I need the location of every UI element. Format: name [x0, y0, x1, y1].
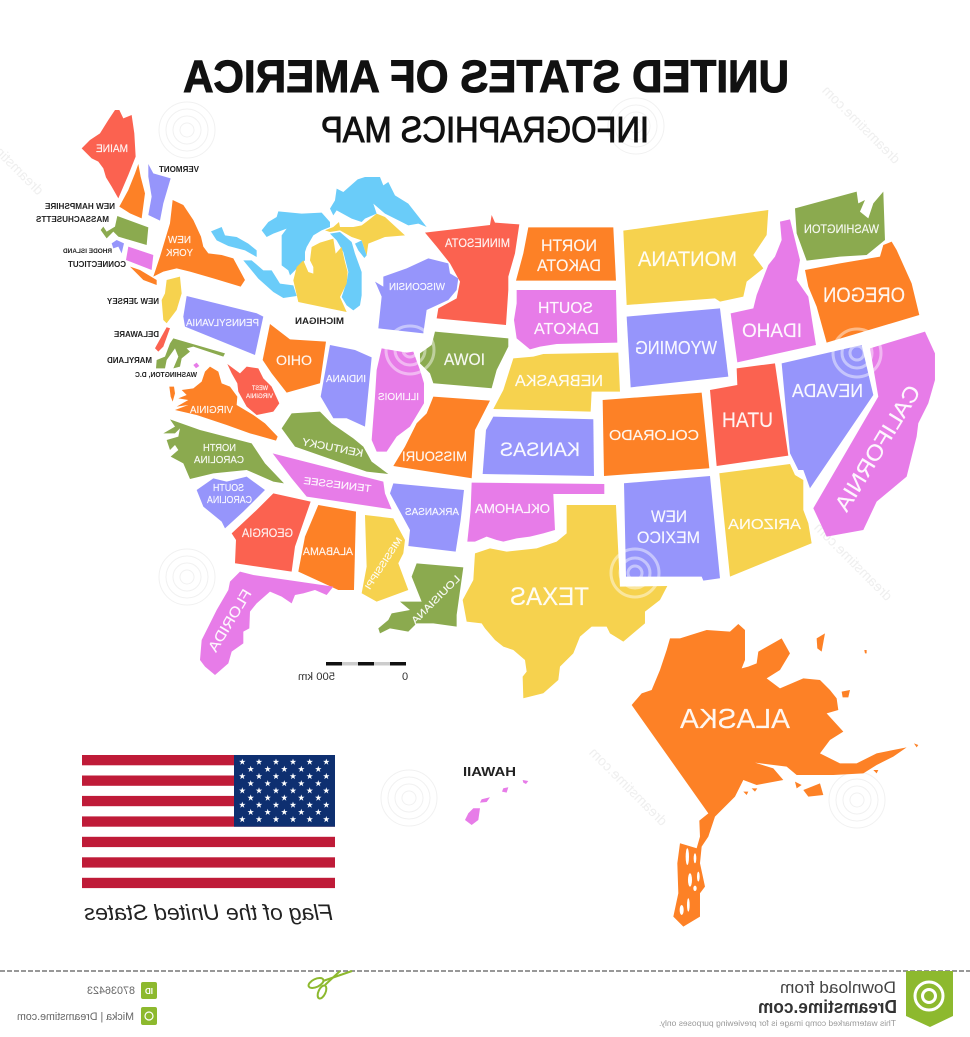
state: South Dakota: DAKOTA	[534, 321, 599, 338]
state name labels outside map: MICHIGAN	[295, 316, 344, 327]
state: Wyoming: WYOMING	[635, 338, 717, 358]
state: Minnesota	[425, 215, 519, 325]
state: Rhode Island	[112, 240, 124, 253]
footer: image id	[87, 982, 157, 999]
state: Pennsylvania: PENNSYLVANIA	[186, 317, 259, 329]
state: Oklahoma: OKLAHOMA	[475, 501, 550, 516]
state: North Dakota: DAKOTA	[536, 256, 601, 275]
state: Oregon	[805, 242, 919, 343]
state: North Carolina	[163, 419, 284, 483]
watermark spirals	[159, 98, 885, 828]
state: Arizona	[719, 464, 812, 577]
state: Illinois: ILLINOIS	[378, 392, 419, 403]
footer: image id: 87036423	[87, 985, 135, 997]
state: Idaho: IDAHO	[742, 321, 802, 342]
state: Mississippi: MISSISSIPPI	[363, 535, 404, 591]
faint spirals over states	[386, 326, 881, 597]
state: Washington	[795, 192, 885, 261]
state: Maine: MAINE	[96, 143, 128, 155]
state: Arkansas	[390, 483, 464, 552]
state: Indiana	[321, 345, 372, 427]
state: Illinois	[372, 348, 424, 452]
state: South Carolina	[197, 477, 265, 528]
state: Texas	[463, 505, 667, 698]
footer: image id: ID	[145, 987, 153, 996]
state name labels outside map: NEW JERSEY	[107, 296, 159, 306]
state: New Hampshire	[119, 164, 145, 218]
state: Texas: TEXAS	[510, 583, 589, 611]
state: Idaho	[731, 219, 816, 362]
state: New Mexico	[624, 476, 720, 581]
state: Montana	[623, 210, 768, 305]
state: South Carolina: CAROLINA	[207, 495, 252, 506]
state: Alaska: ALASKA	[680, 703, 790, 734]
state: Arkansas: ARKANSAS	[405, 507, 459, 518]
state: Wyoming	[627, 308, 728, 387]
state: Pennsylvania	[183, 296, 263, 355]
state: Minnesota: MINNESOTA	[445, 236, 510, 250]
state: New York: NEW	[168, 234, 191, 246]
state: South Dakota	[514, 290, 617, 349]
state: Alabama: ALABAMA	[302, 546, 353, 558]
state: Virginia: VIRGINIA	[190, 405, 233, 416]
state: South Dakota: SOUTH	[538, 300, 593, 317]
flag of the United States	[82, 755, 335, 888]
state name labels outside map: NEW HAMPSHIRE	[45, 201, 115, 211]
footer: download text: Download from	[780, 978, 896, 997]
state: Maine	[82, 110, 136, 198]
state: North Dakota	[516, 227, 616, 281]
state: Virginia	[169, 367, 278, 441]
state name labels outside map: VERMONT	[158, 164, 199, 174]
state: West Virginia: VIRGINIA	[245, 393, 273, 400]
state: Nevada	[782, 345, 873, 488]
state: Utah: UTAH	[722, 409, 773, 432]
footer dashed line	[0, 970, 970, 972]
state: Wisconsin: WISCONSIN	[389, 282, 445, 293]
state: Louisiana: LOUISIANA	[409, 574, 463, 627]
state: Wisconsin	[375, 258, 458, 333]
state: Kentucky	[282, 412, 388, 474]
state: Ohio	[263, 324, 326, 393]
watermark text: dreamstime.com	[811, 519, 896, 604]
state: Missouri	[393, 397, 490, 478]
state: California	[813, 332, 935, 537]
watermark text: dreamstime.com	[819, 82, 904, 167]
state: Georgia: GEORGIA	[242, 526, 293, 540]
state: Arizona: ARIZONA	[728, 516, 801, 533]
subtitle: INFOGRAPHICS MAP	[321, 109, 649, 150]
state: Massachusetts	[101, 216, 148, 245]
state: Nebraska: NEBRASKA	[515, 373, 603, 390]
state: Alabama	[298, 505, 356, 590]
footer: download text	[659, 978, 897, 1028]
state: Hawaii: HAWAII	[463, 764, 516, 779]
title: UNITED STATES OF AMERICA	[183, 51, 789, 102]
state: Tennessee: TENNESSEE	[303, 476, 372, 495]
state: North Carolina: CAROLINA	[194, 455, 244, 466]
state: North Dakota: NORTH	[541, 236, 597, 255]
state: New Jersey	[162, 277, 182, 323]
state: Florida	[200, 572, 333, 675]
state: New Mexico: MEXICO	[637, 529, 700, 547]
watermark text	[0, 82, 904, 829]
footer: dreamstime badge	[906, 971, 953, 1027]
state: Nebraska	[493, 353, 620, 412]
state: Colorado: COLORADO	[609, 427, 699, 444]
watermark text: dreamstime.com	[586, 744, 671, 829]
state: Georgia	[232, 493, 311, 572]
state: California: CALIFORNIA	[829, 381, 926, 516]
state: Oklahoma	[467, 483, 604, 542]
state: Montana: MONTANA	[638, 248, 737, 271]
flag caption: Flag of the United States	[84, 900, 333, 925]
state name labels outside map: DELAWARE	[114, 329, 159, 339]
state: Iowa: IOWA	[443, 350, 485, 369]
footer: author credit: Micka | Dreamstime.com	[17, 1011, 134, 1023]
state: Oregon: OREGON	[823, 284, 905, 307]
state: Nevada: NEVADA	[792, 381, 863, 401]
scale bar: 500 km	[298, 671, 335, 683]
state: Alaska	[632, 624, 918, 927]
state: Kansas	[483, 417, 594, 476]
state: Vermont	[148, 164, 171, 221]
great lakes	[211, 177, 427, 310]
state: Utah	[710, 363, 788, 466]
state: Mississippi	[362, 515, 408, 602]
state: South Carolina: SOUTH	[213, 483, 244, 494]
state: Hawaii	[463, 764, 528, 825]
footer: download text: This watermarked comp image is for previewing purposes only.	[659, 1018, 896, 1028]
state name labels outside map	[36, 164, 344, 379]
icon: scissors	[307, 971, 352, 1000]
state: North Carolina: NORTH	[203, 443, 236, 454]
scale bar: 0	[402, 671, 408, 683]
state name labels outside map: WASHINGTON, D.C	[135, 372, 197, 379]
state: West Virginia	[227, 364, 279, 415]
state: New York	[130, 200, 245, 287]
scale bar	[298, 662, 408, 683]
state: Washington: WASHINGTON	[804, 222, 879, 236]
state: Ohio: OHIO	[276, 352, 312, 368]
state: Colorado	[603, 393, 709, 476]
state name labels outside map: CONNECTICUT	[67, 259, 126, 269]
state name labels outside map: MASSACHUSETTS	[36, 214, 109, 224]
state: Delaware	[155, 327, 170, 352]
state: Michigan	[293, 214, 405, 312]
state: Florida: FLORIDA	[205, 587, 255, 655]
state: Iowa	[420, 332, 508, 388]
state: Kansas: KANSAS	[500, 440, 580, 461]
state: West Virginia: WEST	[252, 385, 268, 392]
state: Washington DC	[193, 363, 199, 368]
state: New York: YORK	[166, 247, 193, 259]
state: Tennessee	[273, 453, 392, 509]
state: Louisiana	[378, 563, 463, 633]
state: Indiana: INDIANA	[326, 374, 366, 385]
state: New Mexico: NEW	[651, 508, 687, 526]
footer: author credit	[17, 1007, 157, 1025]
state name labels outside map: MARYLAND	[107, 355, 152, 365]
state: Connecticut	[126, 247, 153, 270]
state: Maryland	[156, 338, 225, 368]
state name labels outside map: RHODE ISLAND	[63, 248, 112, 255]
footer: download text: Dreamstime.com	[758, 997, 897, 1017]
state: Kentucky: KENTUCKY	[301, 436, 364, 460]
state: Missouri: MISSOURI	[402, 448, 467, 464]
